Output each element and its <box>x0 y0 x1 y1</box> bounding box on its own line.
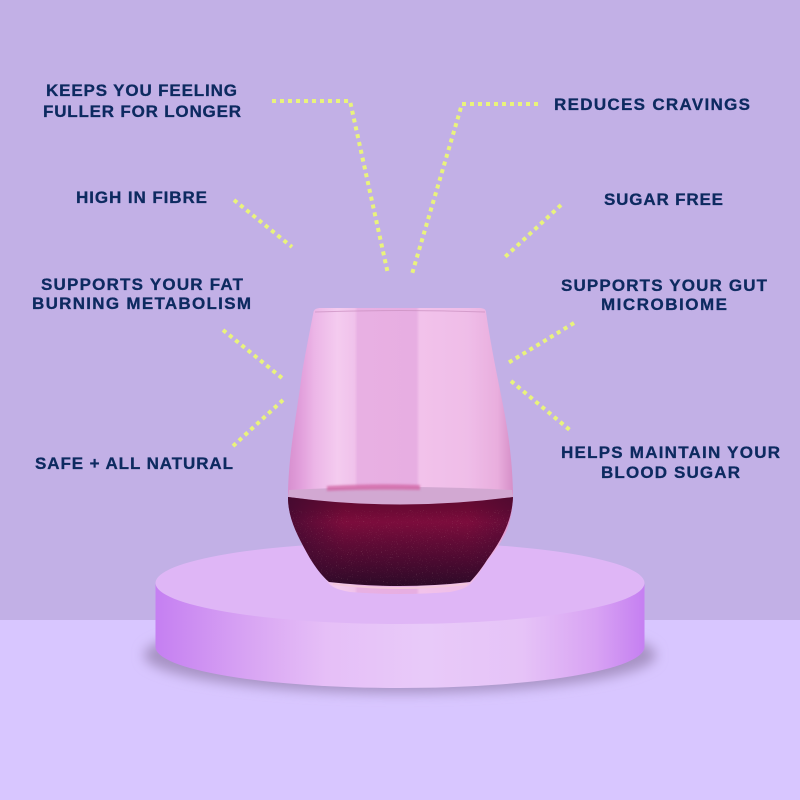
pale liquid surface <box>288 487 513 504</box>
podium shadow <box>144 617 656 693</box>
podium <box>156 542 644 688</box>
label: supports your fat burning metabolism: BURNING METABOLISM <box>32 294 251 313</box>
label: supports your gut microbiome: SUPPORTS YOUR GUT <box>561 276 768 295</box>
connector: gut microbiome <box>508 323 574 363</box>
label: helps maintain your blood sugar <box>561 443 780 482</box>
connector: fat burning metabolism <box>223 330 282 378</box>
rim highlight <box>315 310 485 312</box>
label: supports your gut microbiome: MICROBIOME <box>601 295 727 314</box>
label: keeps you feeling fuller for longer: KEEPS YOU FEELING <box>46 81 237 100</box>
pink meniscus band <box>327 484 420 491</box>
connector: sugar free <box>505 205 561 257</box>
glass of dark red drink <box>288 308 513 594</box>
label: supports your fat burning metabolism <box>32 275 251 313</box>
connector: safe and natural <box>232 400 283 447</box>
connector: keeps you feeling fuller <box>272 101 388 274</box>
glass base highlight <box>333 584 467 588</box>
background wall <box>0 0 800 620</box>
label: helps maintain your blood sugar: BLOOD SUGAR <box>601 463 740 482</box>
label: keeps you feeling fuller for longer <box>43 81 241 121</box>
label: helps maintain your blood sugar: HELPS MAINTAIN YOUR <box>561 443 780 462</box>
connector: high in fibre <box>234 200 292 247</box>
glass body <box>288 308 513 594</box>
label: sugar free: SUGAR FREE <box>604 190 723 209</box>
label: supports your gut microbiome <box>561 276 768 314</box>
label: keeps you feeling fuller for longer: FULLER FOR LONGER <box>43 102 241 121</box>
drink <box>288 497 513 586</box>
label: high in fibre: HIGH IN FIBRE <box>76 188 207 207</box>
label: safe + all natural: SAFE + ALL NATURAL <box>35 454 233 473</box>
label: reduces cravings: REDUCES CRAVINGS <box>554 95 750 114</box>
floor <box>0 620 800 800</box>
label: supports your fat burning metabolism: SUPPORTS YOUR FAT <box>41 275 244 294</box>
drink bubbles <box>288 510 513 590</box>
drink edge shading <box>288 497 513 586</box>
connector: blood sugar <box>511 381 571 431</box>
connector: reduces cravings <box>412 104 538 274</box>
